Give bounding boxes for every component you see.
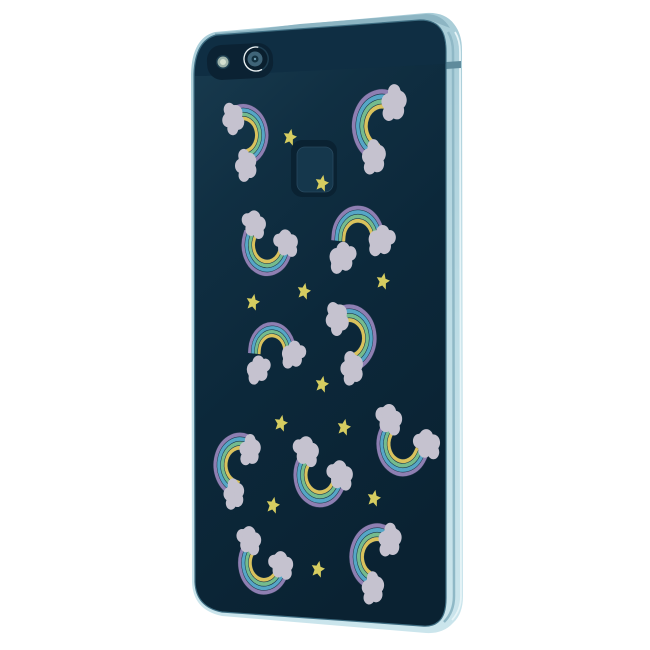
side button seam: [446, 61, 461, 69]
rainbow 4: [324, 205, 400, 280]
rainbow 3: [236, 204, 303, 282]
case outer shell: [191, 13, 463, 633]
icon: camera lens: [240, 43, 272, 75]
rainbow 11: [342, 515, 405, 608]
rainbow 8: [286, 430, 358, 517]
case top rim: [215, 14, 450, 38]
top glass band: [195, 21, 446, 76]
rainbow pattern: [209, 80, 446, 608]
rainbow 7: [209, 427, 264, 512]
rainbow 2: [344, 80, 410, 178]
case right mid strip: [444, 32, 454, 622]
fingerprint sensor: [291, 140, 337, 197]
rainbow 1: [220, 99, 272, 182]
icon: flash: [216, 55, 230, 69]
rainbow 9: [369, 397, 446, 485]
phone back panel: [194, 20, 446, 626]
stars: [245, 127, 391, 578]
rainbow 6: [323, 299, 379, 387]
rainbow 10: [230, 520, 298, 604]
case right highlight: [452, 32, 461, 620]
rainbow 5: [242, 322, 310, 390]
camera module: [206, 42, 274, 81]
